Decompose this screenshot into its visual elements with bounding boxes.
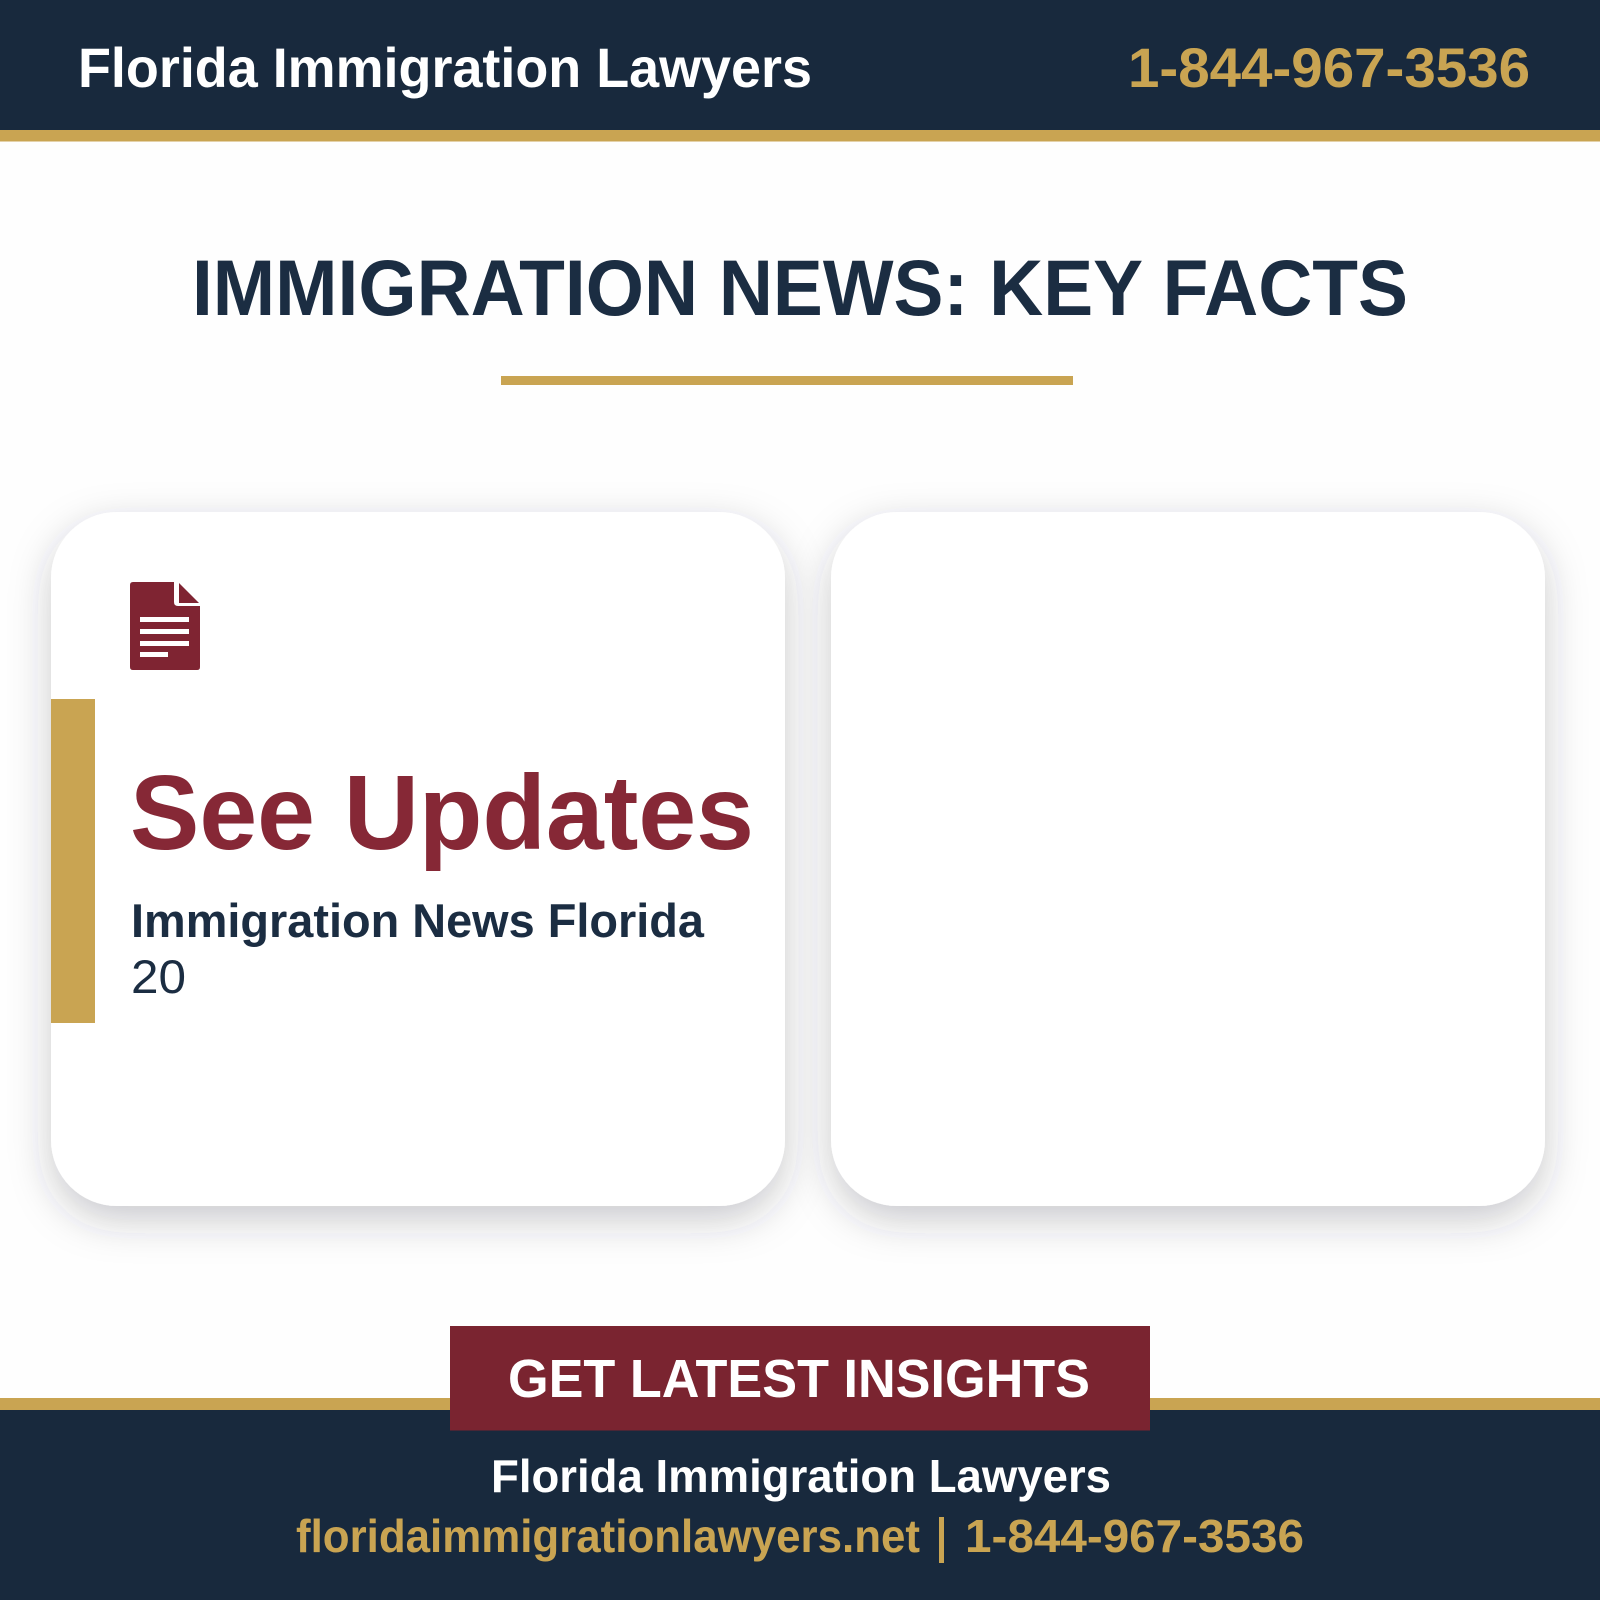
footer website and phone: 1-844-967-3536 [965,1510,1304,1562]
footer [0,1398,1600,1600]
title underline [501,376,1073,385]
header phone number: 1-844-967-3536 [1128,36,1530,99]
gold accent bar [51,699,95,1023]
icon: document [130,582,200,670]
call to action text: GET LATEST INSIGHTS [508,1349,1090,1409]
header firm name: Florida Immigration Lawyers [78,36,812,99]
call to action banner [450,1326,1150,1430]
footer website and phone [296,1510,1304,1563]
card subheading: Immigration News Florida [131,894,705,947]
title: IMMIGRATION NEWS: KEY FACTS [192,243,1408,332]
card heading: See Updates [130,754,754,872]
panel: empty card [831,512,1545,1206]
footer website and phone: floridaimmigrationlawyers.net [296,1510,920,1562]
footer firm name: Florida Immigration Lawyers [491,1450,1111,1502]
card number text: 20 [131,950,186,1003]
panel: see updates card [51,512,785,1206]
header bar [0,0,1600,142]
